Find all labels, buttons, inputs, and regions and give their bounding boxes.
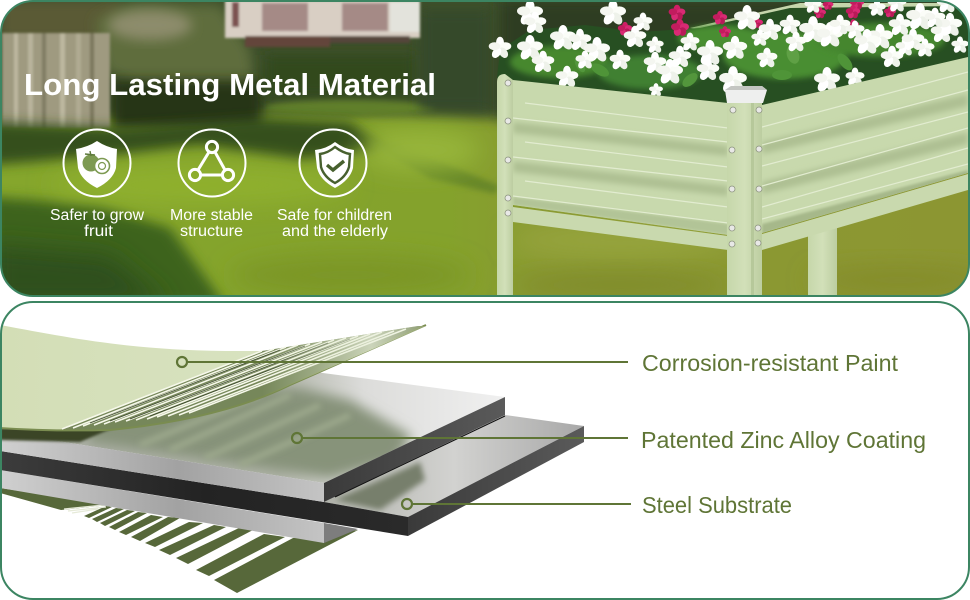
- garden background: [0, 0, 970, 305]
- icon: shield with check: [300, 130, 366, 196]
- house: [225, 0, 420, 47]
- back leg: [808, 228, 837, 297]
- label: more stable structure: More stable: [170, 207, 253, 224]
- callout line: paint: [177, 357, 628, 367]
- center post: [727, 100, 762, 297]
- label: patented zinc alloy coating: Patented Zinc Alloy Coating: [641, 427, 926, 453]
- peeled paint sheet: [0, 325, 426, 442]
- label: safer to grow fruit: fruit: [84, 223, 114, 240]
- flower foliage: [497, 6, 970, 106]
- callout line: steel: [402, 499, 631, 509]
- bottom painted strips: [0, 488, 358, 593]
- label: safe for children and the elderly: and the elderly: [282, 223, 388, 240]
- label: more stable structure: structure: [180, 223, 243, 240]
- panel: material layers: [0, 302, 969, 599]
- label: steel substrate: Steel Substrate: [642, 492, 792, 518]
- zinc coating plate: [0, 370, 505, 502]
- left panel: [513, 80, 728, 250]
- planter back rim: [690, 3, 942, 28]
- steel substrate: [0, 415, 584, 536]
- white and pink flowers: [489, 0, 969, 97]
- fence: [2, 33, 110, 128]
- left post: [497, 74, 513, 297]
- title: Long Lasting Metal Material: [24, 67, 436, 102]
- label: safe for children and the elderly: Safe for children: [277, 207, 392, 224]
- left rail: [513, 207, 728, 250]
- fine strip lines: [64, 505, 106, 513]
- post cap: [725, 86, 767, 103]
- icon: shield with fruit: [64, 130, 130, 196]
- right panel: [762, 57, 968, 250]
- panel: top garden photo: [0, 0, 970, 305]
- third gray layer: [0, 470, 358, 543]
- right rail: [762, 174, 968, 250]
- label: corrosion-resistant paint: Corrosion-resistant Paint: [642, 350, 899, 376]
- icon: triangle structure: [178, 130, 246, 196]
- planter raised bed: [497, 57, 968, 297]
- rivets: [505, 80, 762, 247]
- callout line: zinc: [292, 433, 628, 443]
- label: safer to grow fruit: Safer to grow: [50, 207, 145, 224]
